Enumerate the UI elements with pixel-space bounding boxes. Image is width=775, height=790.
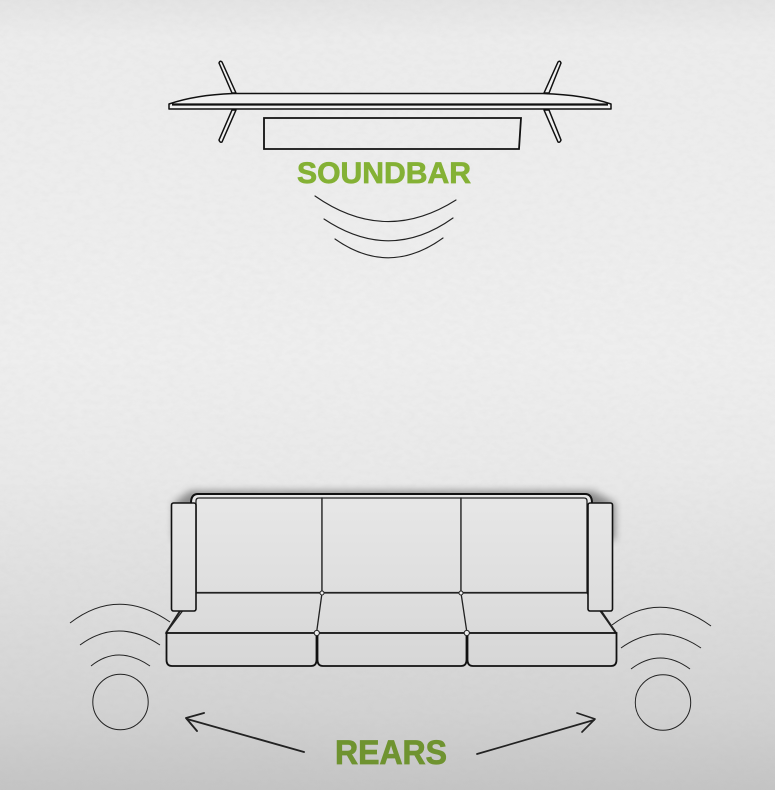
sound waves from soundbar — [315, 196, 456, 258]
cushion joints — [314, 591, 469, 636]
right arm — [588, 503, 612, 611]
heading: soundbar: SOUNDBAR — [297, 157, 471, 190]
heading: rears: REARS — [335, 734, 447, 772]
sofa — [166, 491, 616, 666]
tv body — [169, 94, 611, 109]
sofa shadow — [174, 491, 615, 540]
sofa body — [191, 494, 592, 600]
front cushions — [166, 633, 616, 666]
seat dividers — [166, 593, 616, 633]
left arrow — [186, 713, 304, 752]
right arrow — [477, 713, 595, 754]
seat deck — [166, 593, 616, 633]
tv legs — [219, 61, 561, 142]
left arm — [172, 503, 196, 611]
soundbar box — [264, 118, 521, 149]
back cushions — [196, 498, 587, 592]
tv seen from above — [169, 61, 611, 142]
left rear speaker and waves — [70, 604, 170, 730]
right rear speaker and waves — [612, 607, 711, 730]
